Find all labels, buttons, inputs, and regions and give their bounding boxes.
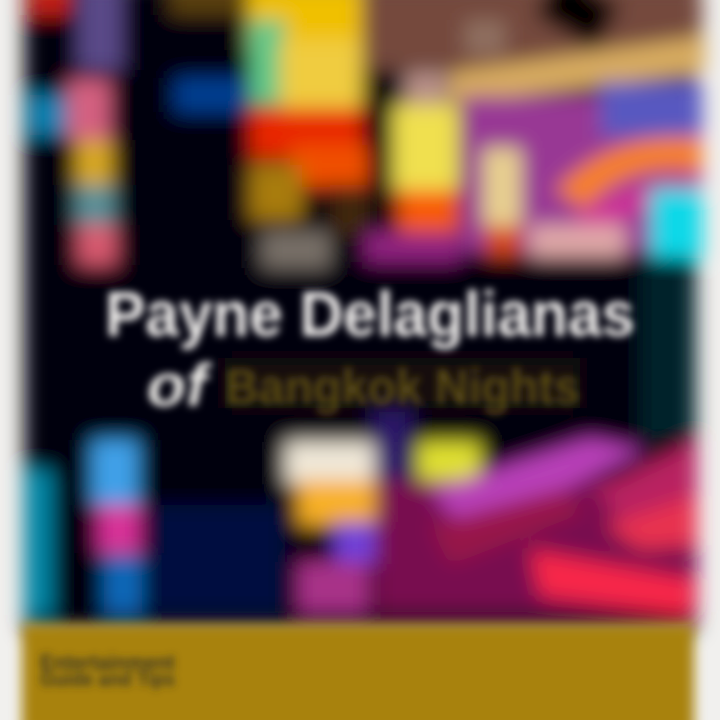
tan band (450, 36, 705, 104)
purple mural (462, 82, 702, 258)
centre dark purple column (372, 410, 412, 510)
title: Bangkok Nights (225, 359, 580, 415)
title: of (147, 352, 212, 419)
brown ceiling (362, 0, 702, 70)
title second line backing (225, 358, 580, 408)
lower right purple and red seats (375, 438, 697, 616)
footer text: Entertainment (40, 650, 176, 675)
upper left colour strip (30, 0, 250, 265)
centre flag (248, 0, 370, 268)
right dark panel (640, 270, 696, 440)
gold footer bar (22, 624, 694, 720)
title (105, 278, 635, 419)
title: Payne Delaglianas (105, 278, 635, 350)
lower left blue strip (26, 440, 285, 615)
footer text (40, 650, 176, 691)
footer text: Guide and Tips (40, 669, 175, 691)
yellow banners (365, 72, 521, 262)
lower centre yellow block (286, 442, 480, 612)
